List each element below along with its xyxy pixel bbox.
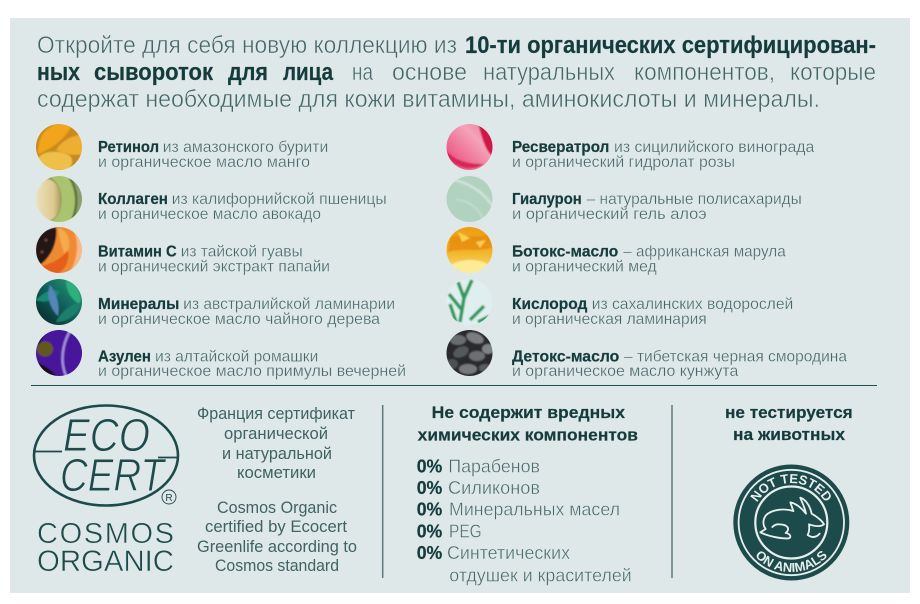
badge: not tested on animals: NOT TESTED: [750, 474, 831, 502]
item: Минералы: Минералы: [98, 296, 179, 313]
intro heading: для: [228, 59, 268, 86]
item: Гиалурон: – натуральные полисахариды: [587, 191, 802, 208]
free-from heading: [418, 403, 638, 445]
item: Витамин С: из тайской гуавы: [181, 244, 303, 261]
item: Гиалурон: и органический гель алоэ: [512, 206, 707, 223]
item: Гиалурон: Гиалурон: [512, 191, 582, 208]
certification text: Greenlife according to: [197, 538, 357, 556]
item: Кислород: и органическая ламинария: [512, 311, 707, 328]
Ecocert logo: ECO: [63, 409, 150, 461]
icon: honey: [446, 227, 492, 273]
item: Ресвератрол: и органический гидролат розы: [512, 154, 735, 171]
icon: kelp: [36, 279, 82, 325]
free-from list: Синтетических: [447, 543, 570, 563]
item: Ресвератрол: Ресвератрол: [512, 139, 609, 156]
left ingredient column: [33, 122, 406, 380]
free-from list: 0%: [417, 522, 442, 542]
item: Ресвератрол: из сицилийского винограда: [614, 139, 814, 156]
not tested heading: не тестируется: [725, 403, 853, 422]
item: Ботокс-масло: [445, 225, 786, 276]
free-from list: 0%: [417, 543, 442, 563]
icon: aloe gel: [446, 176, 492, 222]
intro heading: натуральных: [483, 59, 615, 86]
intro heading: основе: [392, 59, 467, 86]
item: Витамин С: Витамин С: [98, 244, 177, 261]
certification text: Cosmos standard: [215, 557, 339, 575]
item: Детокс-масло: и органическое масло кунжута: [512, 363, 738, 380]
free-from heading: Не содержит вредных: [432, 403, 626, 422]
item: Ботокс-масло: Ботокс-масло: [512, 244, 619, 261]
icon: mango: [36, 124, 82, 170]
intro heading: содержат необходимые для кожи витамины, аминокислоты и минералы.: [37, 86, 820, 113]
certification text: certified by Ecocert: [205, 518, 347, 536]
free-from list: отдушек и красителей: [449, 566, 632, 586]
free-from list: Силиконов: [448, 478, 540, 498]
intro heading: на: [352, 59, 374, 86]
Ecocert logo: [33, 406, 179, 506]
intro heading: Откройте для себя новую коллекцию из: [37, 32, 457, 59]
item: Детокс-масло: – тибетская черная смородина: [624, 349, 847, 366]
right ingredient column: [445, 122, 847, 380]
icon: black sesame: [446, 330, 492, 376]
Ecocert logo: CERT: [60, 449, 166, 501]
item: Коллаген: и органическое масло авокадо: [98, 206, 321, 223]
Cosmos Organic wordmark: COSMOS: [37, 518, 174, 550]
intro heading: компонентов,: [634, 59, 775, 86]
item: Коллаген: Коллаген: [98, 191, 168, 208]
intro heading: лица: [283, 59, 334, 86]
item: Азулен: из алтайской ромашки: [155, 349, 318, 366]
item: Ботокс-масло: и органический мед: [512, 259, 657, 276]
item: Кислород: [445, 277, 793, 328]
intro heading: сывороток: [94, 59, 214, 86]
icon: primrose: [36, 330, 82, 376]
item: Минералы: и органическое масло чайного дерева: [98, 311, 380, 328]
certification text: Cosmos Organic: [217, 499, 337, 517]
item: Азулен: Азулен: [98, 349, 151, 366]
icon: rose petal: [446, 124, 492, 170]
icon: avocado: [36, 176, 82, 222]
free-from list: 0%: [417, 456, 442, 476]
icon: rabbit: [760, 498, 824, 538]
free-from list: PEG: [449, 522, 482, 542]
item: Гиалурон: [445, 174, 802, 224]
item: Коллаген: из калифорнийской пшеницы: [172, 191, 387, 208]
intro heading: 10-ти органических сертифицирован-: [465, 32, 876, 59]
badge: not tested on animals: [733, 464, 850, 580]
free-from list: 0%: [417, 500, 442, 520]
item: Ретинол: [34, 122, 328, 172]
badge: not tested on animals: ON ANIMALS: [756, 551, 826, 572]
free-from list: Минеральных масел: [449, 500, 620, 520]
free-from heading: химических компонентов: [418, 426, 638, 445]
free-from list: 0%: [417, 478, 442, 498]
item: Азулен: и органическое масло примулы вечерней: [98, 363, 406, 380]
icon: seaweed: [448, 279, 489, 324]
not tested heading: [725, 403, 853, 444]
item: Кислород: Кислород: [512, 296, 587, 313]
item: Ретинол: и органическое масло манго: [98, 154, 310, 171]
item: Азулен: [34, 328, 406, 380]
free-from list: Парабенов: [448, 456, 540, 476]
item: Витамин С: и органический экстракт папайи: [98, 259, 330, 276]
certification text: органической: [224, 425, 328, 443]
item: Ресвератрол: [445, 122, 814, 172]
certification text: [197, 405, 357, 575]
item: Детокс-масло: [445, 328, 847, 380]
item: Ботокс-масло: – африканская марула: [623, 244, 786, 261]
certification text: косметики: [237, 464, 316, 482]
item: Ретинол: Ретинол: [98, 139, 159, 156]
item: Кислород: из сахалинских водорослей: [592, 296, 793, 313]
certification text: и натуральной: [222, 445, 332, 463]
intro heading: ных: [37, 59, 81, 86]
icon: papaya: [36, 227, 82, 273]
intro heading: которые: [790, 59, 876, 86]
Ecocert logo: R: [165, 493, 173, 504]
certification text: Франция сертификат: [197, 405, 355, 423]
item: Ретинол: из амазонского бурити: [163, 139, 328, 156]
free-from list: [417, 456, 632, 586]
Cosmos Organic wordmark: ORGANIC: [37, 545, 174, 578]
intro heading: [37, 32, 876, 113]
not tested heading: на животных: [733, 425, 846, 444]
Cosmos Organic wordmark: [37, 518, 174, 578]
item: Витамин С: [34, 225, 330, 276]
item: Коллаген: [33, 174, 387, 224]
item: Минералы: [34, 277, 395, 328]
item: Минералы: из австралийской ламинарии: [183, 296, 395, 313]
item: Детокс-масло: Детокс-масло: [512, 349, 620, 366]
